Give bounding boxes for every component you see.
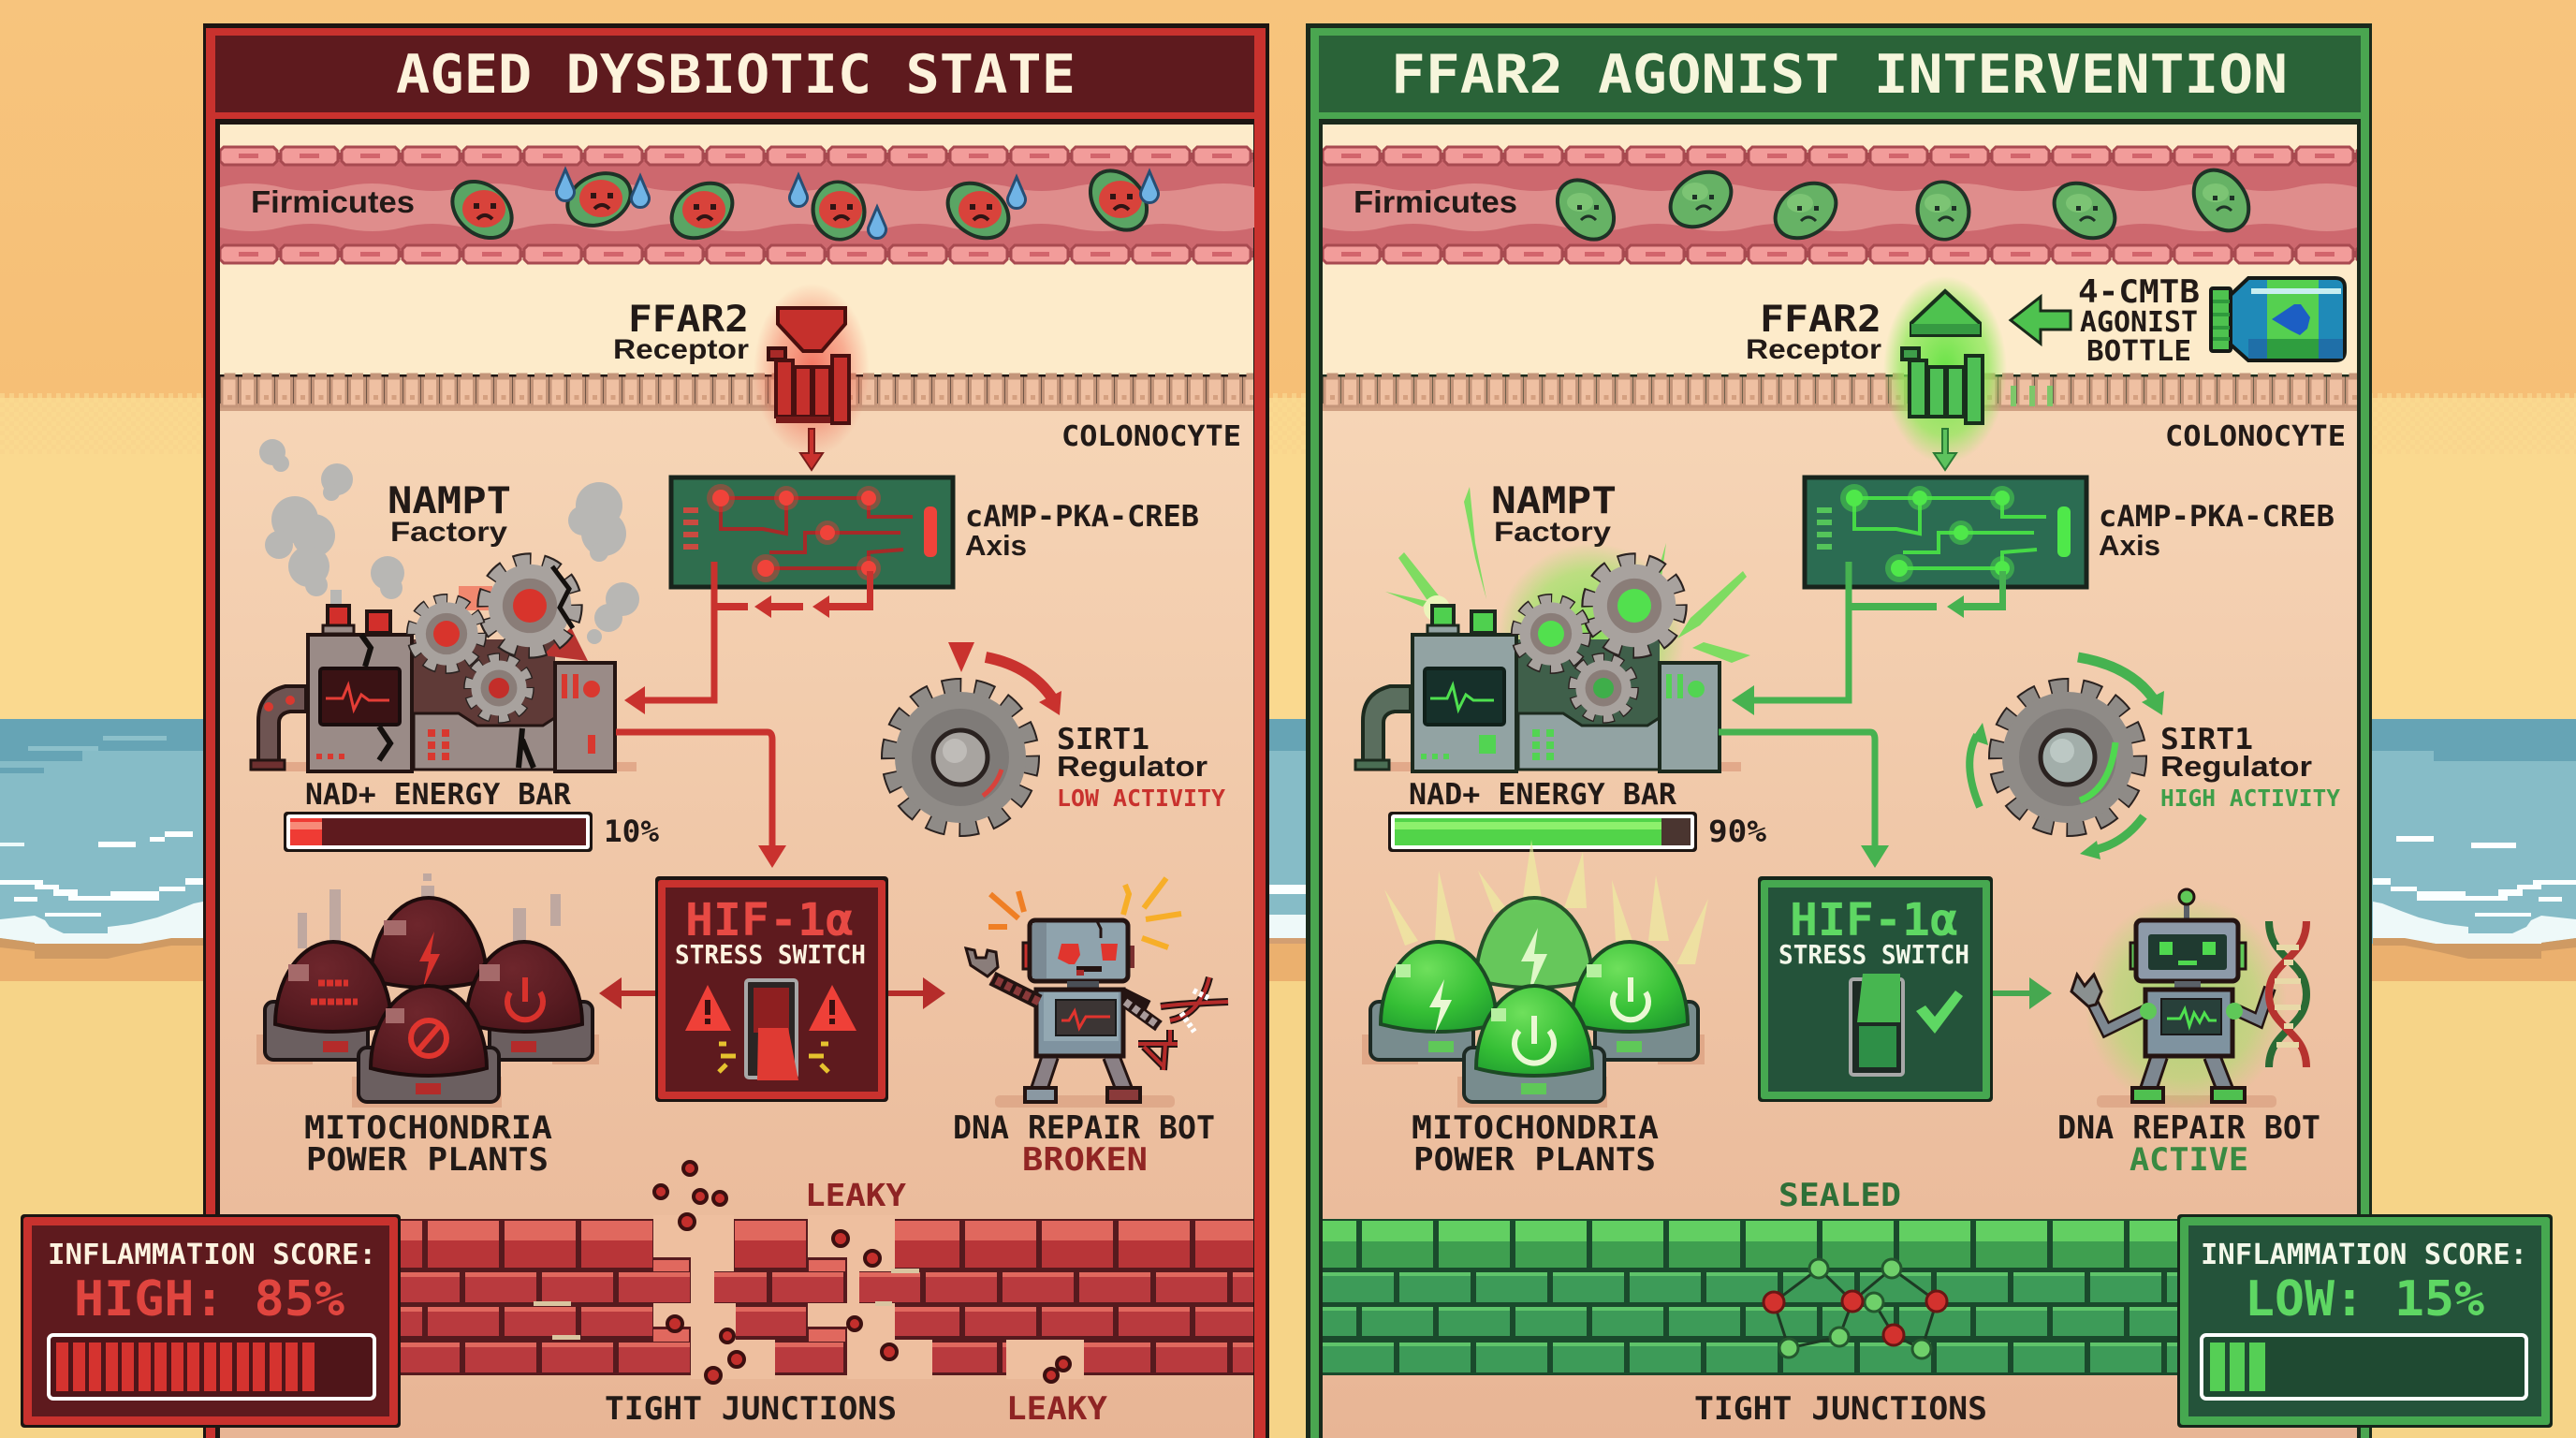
FFAR2 label: Receptor [613, 334, 749, 365]
label: cAMP-PKA-CREB axis [965, 500, 1199, 562]
label: cAMP-PKA-CREB axis: cAMP-PKA-CREB [2099, 500, 2334, 534]
arrow: HIF to DNA bot [888, 977, 945, 1009]
label: cAMP-PKA-CREB axis: cAMP-PKA-CREB [965, 500, 1199, 534]
panel: aged dysbiotic state [21, 23, 1269, 1438]
label: tight junctions: TIGHT JUNCTIONS [1694, 1390, 1987, 1428]
label: leaky bottom: LEAKY [1006, 1390, 1108, 1428]
gut lumen band [1323, 145, 2357, 265]
FFAR2 label: Receptor [1746, 334, 1881, 365]
label: colonocyte: COLONOCYTE [2165, 420, 2346, 453]
label: tight junctions: TIGHT JUNCTIONS [605, 1390, 897, 1428]
arrow: HIF to DNA bot [1993, 977, 2052, 1009]
FFAR2 label: FFAR2 [628, 299, 749, 341]
label: 4-CMTB agonist bottle [2078, 273, 2200, 368]
FFAR2 label [1746, 299, 1881, 365]
SIRT1 regulator gear [892, 642, 1061, 826]
label: NAMPT factory: NAMPT [1491, 480, 1617, 522]
label: SIRT1 regulator low activity: Regulator [1057, 750, 1208, 783]
inflammation score low: LOW: 15% [2245, 1271, 2484, 1328]
label: colonocyte: COLONOCYTE [1061, 420, 1241, 453]
HIF-1a stress switch off [1758, 876, 1993, 1102]
label: DNA repair bot broken: DNA REPAIR BOT [953, 1109, 1215, 1147]
HIF-1a stress switch on: STRESS SWITCH [675, 939, 866, 970]
mitochondria power plants active [1362, 840, 1708, 1108]
arrow: factory to HIF switch [1719, 732, 1875, 852]
label: cAMP-PKA-CREB axis: Axis [965, 529, 1027, 562]
tight junction wall sealed [1323, 1219, 2357, 1375]
mitochondria power plants inactive [256, 873, 599, 1108]
FFAR2 label: FFAR2 [1760, 299, 1881, 341]
label: SIRT1 regulator high activity: Regulator [2160, 750, 2312, 783]
label: DNA repair bot active: ACTIVE [2130, 1141, 2248, 1179]
healthy bacteria [1546, 159, 2260, 251]
label: DNA repair bot broken [953, 1109, 1215, 1179]
label: mitochondria power plants: POWER PLANTS [1413, 1141, 1656, 1179]
HIF-1a stress switch off: HIF-1α [1790, 894, 1958, 946]
label: DNA repair bot broken: BROKEN [1022, 1141, 1148, 1179]
NAMPT factory machine [251, 561, 637, 771]
label: SIRT1 regulator low activity [1057, 723, 1225, 812]
label: leaky top: LEAKY [805, 1177, 906, 1213]
panel frame [1306, 23, 2372, 1438]
label: mitochondria power plants: MITOCHONDRIA [1412, 1109, 1659, 1147]
circuit board: cAMP-PKA-CREB active [1805, 477, 2086, 587]
label: Firmicutes: Firmicutes [1354, 184, 1517, 219]
label: mitochondria power plants: POWER PLANTS [306, 1141, 549, 1179]
value: 90%: 90% [1708, 814, 1767, 849]
DNA repair bot active [2071, 889, 2287, 1111]
label: 4-CMTB agonist bottle: 4-CMTB [2078, 273, 2200, 311]
icon: DNA helix [2269, 921, 2306, 1067]
HIF-1a stress switch on: HIF-1α [685, 894, 854, 946]
cell membrane [1323, 373, 2357, 411]
label: DNA repair bot active: DNA REPAIR BOT [2057, 1109, 2320, 1147]
label: Firmicutes: Firmicutes [251, 184, 415, 219]
NAMPT factory machine active [1355, 543, 1741, 771]
DNA repair bot broken [966, 878, 1228, 1108]
arrow: circuit to factory [1750, 562, 1849, 700]
FFAR2 receptor active [1883, 276, 2007, 463]
stressed bacteria [441, 159, 1159, 249]
NAD+ energy bar 10% [284, 812, 593, 852]
label: SIRT1 regulator high activity [2160, 723, 2340, 812]
panel frame [203, 23, 1269, 1438]
label: mitochondria power plants [1412, 1109, 1659, 1179]
label: NAD+ energy bar: NAD+ ENERGY BAR [1409, 778, 1676, 812]
arrow: broken feedback [714, 571, 873, 618]
inflammation score high [21, 1214, 401, 1428]
inflammation score high: INFLAMMATION SCORE: [48, 1239, 376, 1271]
arrow: receptor to circuit [800, 429, 823, 470]
label: NAD+ energy bar: NAD+ ENERGY BAR [305, 778, 571, 812]
arrow: receptor to circuit [1934, 429, 1956, 470]
NAD+ energy bar 90% [1388, 812, 1697, 852]
energy sparks [1385, 487, 1750, 663]
FFAR2 receptor inactive [754, 284, 870, 456]
smoke clouds [259, 439, 639, 644]
gut lumen band [220, 145, 1254, 265]
panel: FFAR2 agonist intervention [1306, 23, 2553, 1438]
label: NAMPT factory: NAMPT [388, 480, 511, 522]
inflammation score low: INFLAMMATION SCORE: [2201, 1239, 2527, 1271]
label: NAMPT factory: Factory [390, 517, 507, 548]
arrow: bottle to receptor [2011, 297, 2071, 344]
arrow: feedback to circuit line [1849, 571, 2006, 618]
arrow: factory to HIF switch [616, 732, 772, 852]
cell membrane [220, 373, 1253, 411]
HIF-1a stress switch off: STRESS SWITCH [1778, 939, 1969, 970]
title: AGED DYSBIOTIC STATE [396, 44, 1076, 106]
label: mitochondria power plants: MITOCHONDRIA [304, 1109, 552, 1147]
label: NAMPT factory [388, 480, 511, 548]
label: cAMP-PKA-CREB axis [2099, 500, 2334, 562]
HIF-1a stress switch on [655, 876, 888, 1102]
inflammation score low [2177, 1214, 2553, 1428]
label: DNA repair bot active [2057, 1109, 2320, 1179]
title: FFAR2 AGONIST INTERVENTION [1391, 44, 2288, 106]
label: SIRT1 regulator low activity: LOW ACTIVITY [1057, 785, 1225, 812]
circuit board: cAMP-PKA-CREB [671, 477, 953, 587]
FFAR2 label [613, 299, 749, 365]
value: 10%: 10% [604, 814, 660, 849]
tight junction wall broken [220, 1162, 1253, 1383]
label: SIRT1 regulator high activity: SIRT1 [2160, 723, 2253, 756]
label: cAMP-PKA-CREB axis: Axis [2099, 529, 2160, 562]
label: NAMPT factory [1491, 480, 1617, 548]
arrow: circuit to factory [641, 562, 714, 700]
arrow: HIF to mitochondria [599, 977, 655, 1009]
label: sealed: SEALED [1778, 1177, 1901, 1214]
label: NAMPT factory: Factory [1494, 517, 1611, 548]
label: SIRT1 regulator high activity: HIGH ACTIVITY [2160, 785, 2340, 812]
inflammation score high: HIGH: 85% [74, 1271, 344, 1328]
icon: agonist bottle [2211, 278, 2345, 360]
label: SIRT1 regulator low activity: SIRT1 [1057, 723, 1149, 756]
label: 4-CMTB agonist bottle: AGONIST [2080, 306, 2198, 339]
label: 4-CMTB agonist bottle: BOTTLE [2086, 335, 2191, 368]
label: mitochondria power plants [304, 1109, 552, 1179]
SIRT1 regulator gear active [1969, 657, 2164, 859]
